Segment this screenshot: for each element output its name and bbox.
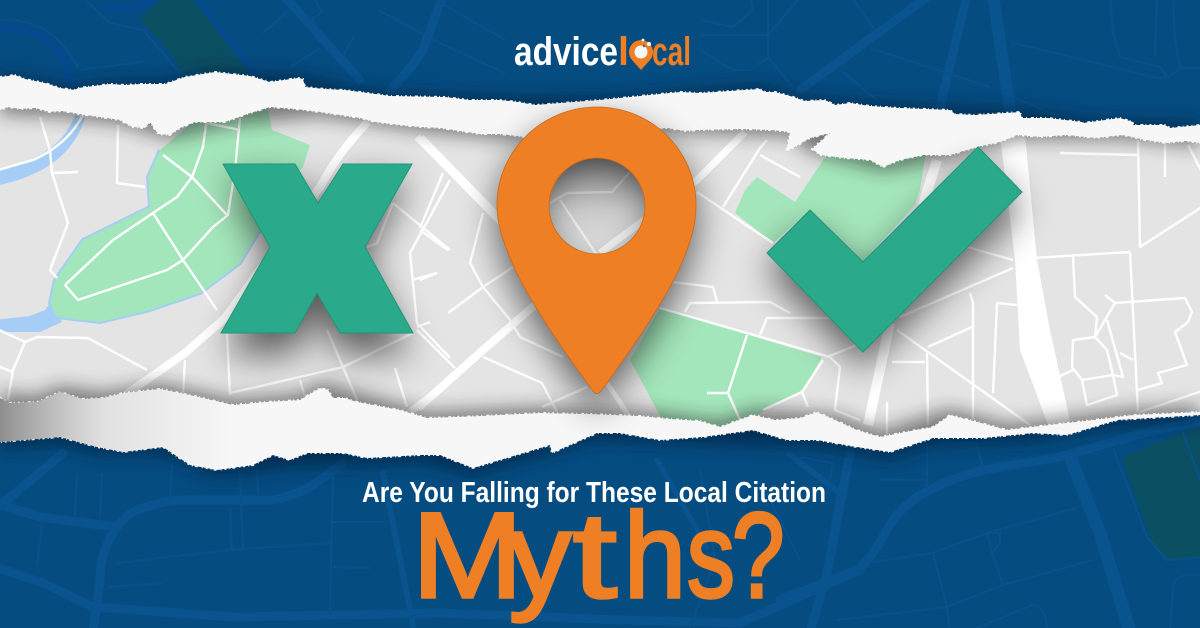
dark green park, bottom right [1122, 427, 1200, 559]
inner shadows cast by the torn paper onto the map [0, 107, 1200, 437]
shadow of torn paper on blue background [0, 70, 1200, 476]
heading: question line: Are You Falling for These Local Citation [362, 477, 826, 509]
heading: Myths? [412, 487, 784, 624]
logo word: cal: cal [652, 30, 691, 74]
pin hole inner shading [548, 157, 646, 255]
icon: teal X [221, 164, 413, 333]
river edge along the park [50, 150, 260, 322]
park: centre bottom [630, 308, 822, 435]
heading: Myths?: y [509, 487, 571, 623]
heading: Myths?: t [573, 487, 617, 623]
park: upper right [735, 155, 926, 261]
major map roads [125, 122, 937, 425]
logo letter: l: l [618, 30, 629, 74]
minor map roads [0, 115, 1200, 440]
torn paper: bottom strip [0, 388, 1200, 470]
logo: advice local [514, 30, 691, 74]
logo icon: location pin as the letter o [629, 39, 653, 70]
paper shading at lower left [0, 389, 233, 470]
river [0, 115, 85, 332]
icon shadows [226, 122, 1022, 408]
logo word: advice: advice [514, 30, 618, 74]
park: left [50, 105, 310, 322]
dark green park, top [140, 0, 250, 73]
torn paper: top strip [0, 72, 1200, 167]
heading: Myths?: s [687, 487, 735, 623]
heading: Myths?: M [412, 487, 523, 623]
heading: Myths?: h [624, 487, 686, 623]
street map strip revealed through the tear [0, 107, 1200, 437]
icon: orange location pin [497, 107, 696, 394]
heading: Myths?: ? [732, 487, 784, 623]
icon: teal check mark [767, 147, 1022, 352]
